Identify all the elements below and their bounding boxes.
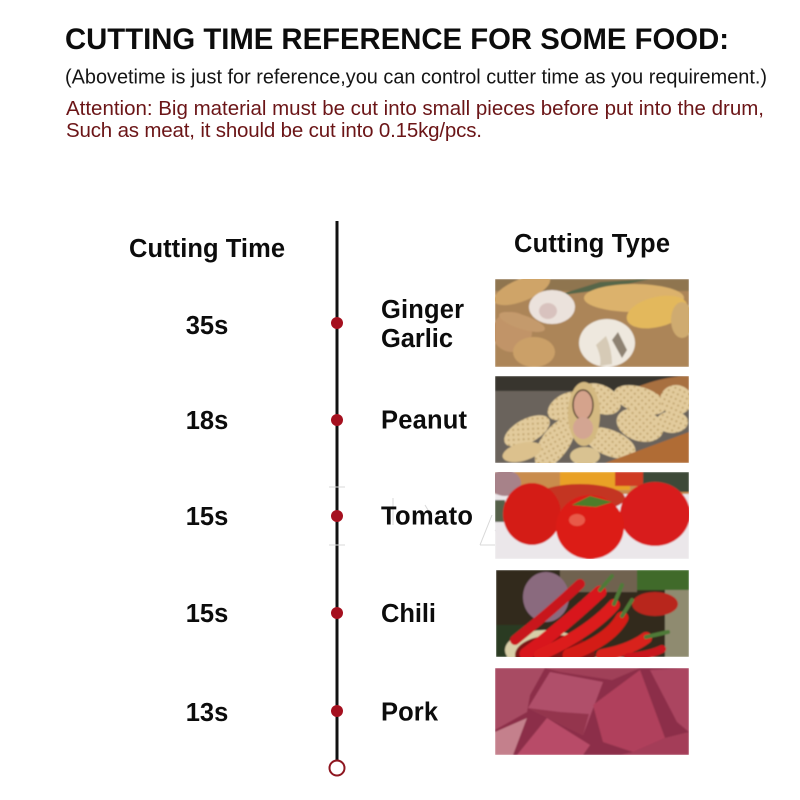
cutting times: 35s: [186, 312, 228, 340]
title: CUTTING TIME REFERENCE FOR SOME FOOD:: [65, 23, 729, 56]
photo: ginger and garlic: [495, 279, 689, 367]
food names: Garlic: [381, 325, 453, 353]
cutting times: 13s: [186, 699, 228, 727]
food names: Tomato: [381, 502, 473, 530]
photo: chili peppers: [496, 570, 689, 657]
cutting times: [186, 312, 228, 727]
food names: [381, 296, 473, 726]
timeline: [330, 221, 344, 776]
photo: peanuts: [495, 376, 689, 463]
food names: Pork: [381, 698, 439, 726]
cutting times: 18s: [186, 407, 228, 435]
attention note: Attention: Big material must be cut into small pieces before put into the drum,: [66, 97, 764, 120]
column heading: cutting time: Cutting Time: [129, 235, 285, 263]
reference note: (Abovetime is just for reference,you can control cutter time as you requirement.): [65, 66, 767, 88]
cutting times: 15s: [186, 503, 228, 531]
column heading: cutting type: Cutting Type: [514, 230, 670, 258]
photo: pork: [495, 668, 689, 755]
food names: Ginger: [381, 296, 464, 324]
photo: tomatoes: [489, 470, 690, 559]
attention note: [66, 97, 764, 142]
food names: Chili: [381, 600, 436, 628]
food names: Peanut: [381, 406, 468, 434]
faint watermark: [329, 487, 510, 545]
cutting times: 15s: [186, 600, 228, 628]
attention note: Such as meat, it should be cut into 0.15kg/pcs.: [66, 119, 482, 142]
